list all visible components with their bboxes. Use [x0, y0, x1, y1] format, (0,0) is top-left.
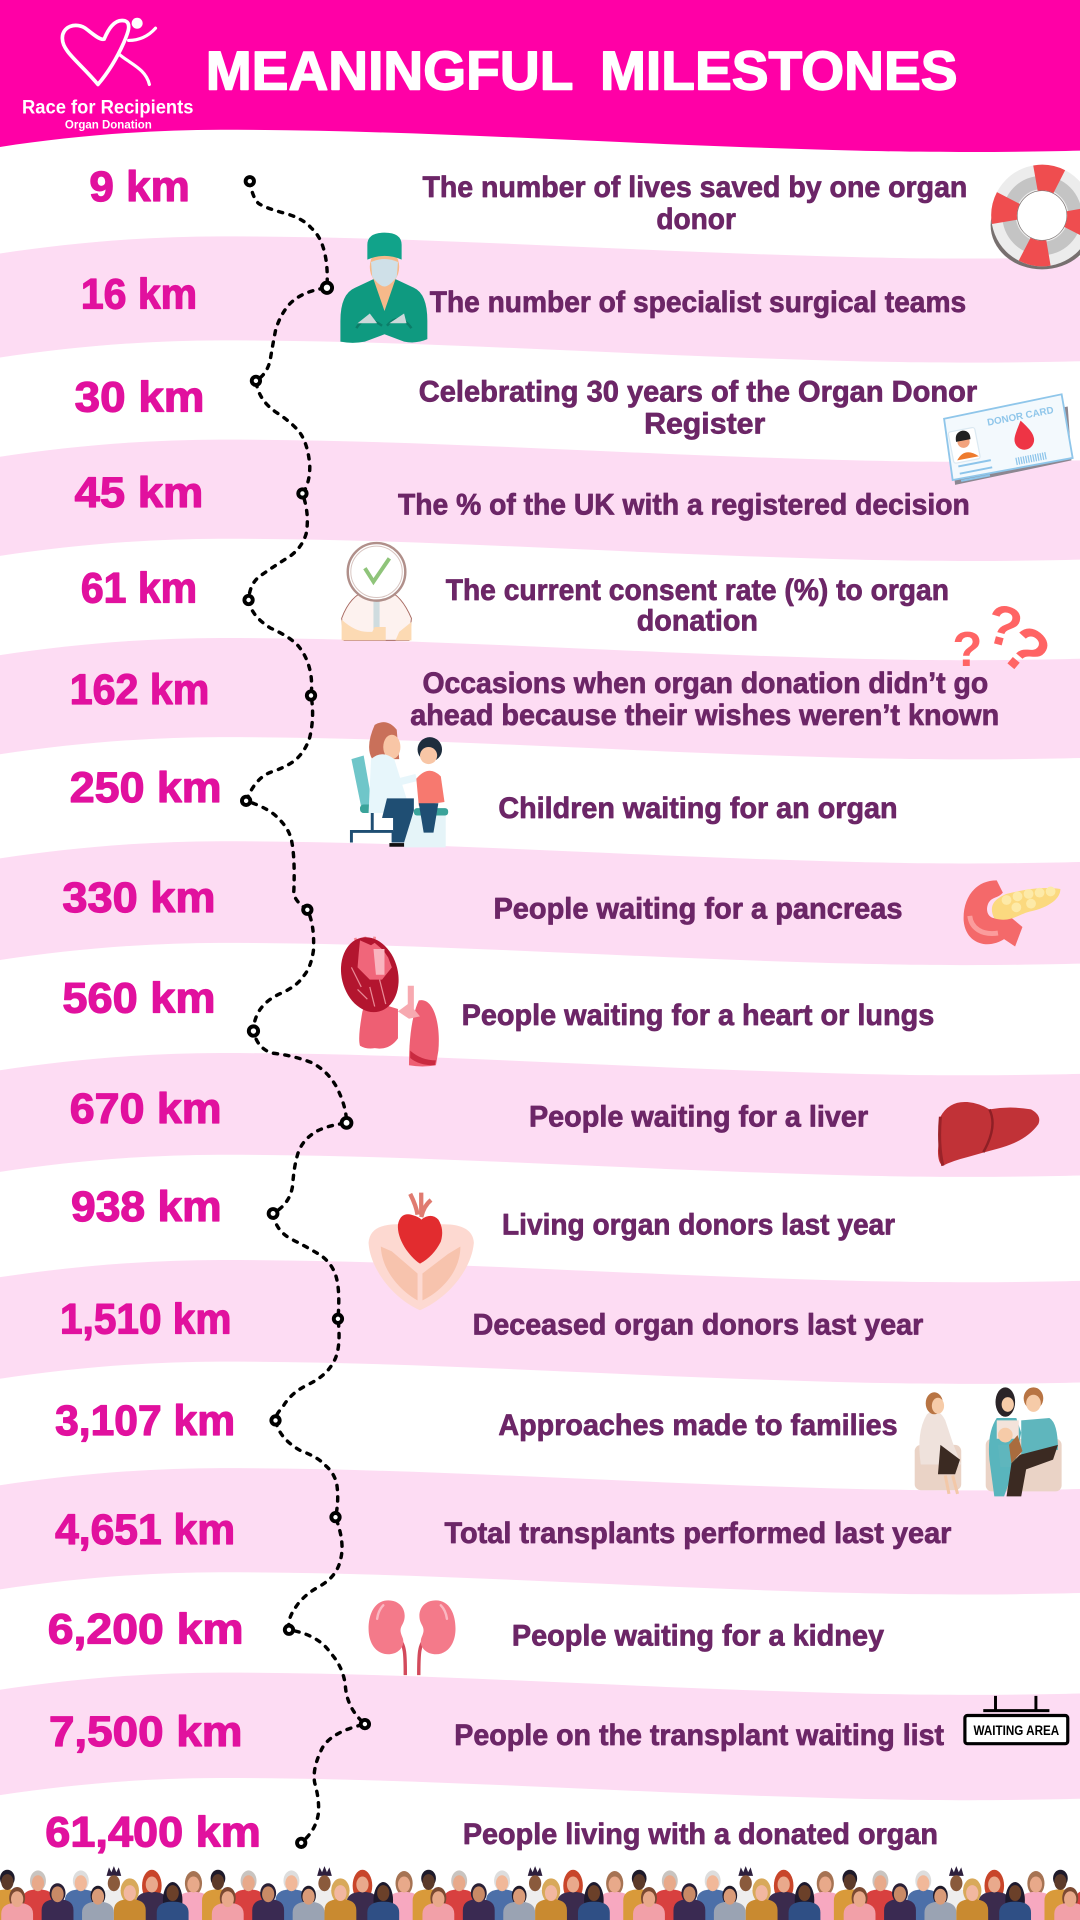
icon: donor card: DONOR CARD: [986, 405, 1055, 429]
row: 61 km: donation: [637, 605, 758, 638]
icon: heart and lungs: [333, 931, 439, 1067]
icon: question marks: ?: [988, 611, 1063, 690]
row: 16 km: The number of specialist surgical teams: [430, 286, 966, 319]
icon: question marks: [952, 591, 1063, 690]
row: 560 km: [62, 975, 934, 1032]
row: 7,500 km: 7,500 km: [49, 1708, 242, 1756]
icon: kidneys: [369, 1600, 456, 1675]
icon: question marks: ?: [979, 591, 1029, 661]
row: 330 km: 330 km: [62, 874, 216, 922]
header banner: [0, 0, 1080, 152]
row: 162 km: ahead because their wishes weren’t known: [410, 699, 999, 732]
icon: donor card: [944, 394, 1073, 485]
row: 61,400 km: [45, 1809, 938, 1857]
logo: Race for Recipients: [22, 18, 193, 132]
row: 7,500 km: People on the transplant waiting list: [454, 1719, 944, 1752]
row: 250 km: 250 km: [70, 764, 222, 812]
row: 45 km: [75, 469, 970, 521]
row: 6,200 km: People waiting for a kidney: [512, 1620, 885, 1653]
row: 938 km: Living organ donors last year: [502, 1208, 895, 1241]
row: 6,200 km: [48, 1605, 885, 1653]
row: 162 km: 162 km: [70, 666, 209, 714]
row: 16 km: [81, 271, 966, 319]
row: 30 km: [75, 373, 977, 440]
row: 61,400 km: 61,400 km: [45, 1809, 261, 1857]
icon: question marks: ?: [952, 623, 982, 677]
row: 670 km: 670 km: [70, 1085, 222, 1133]
row: 6,200 km: 6,200 km: [48, 1605, 244, 1653]
row: 61 km: The current consent rate (%) to organ: [446, 574, 949, 607]
row: 16 km: 16 km: [81, 271, 197, 319]
row: 3,107 km: [55, 1397, 898, 1445]
row: 61 km: 61 km: [81, 564, 197, 612]
row: 162 km: Occasions when organ donation didn’t go: [422, 667, 988, 700]
crowd of people along the bottom: [0, 1866, 1080, 1920]
logo name: Race for Recipients: [22, 97, 193, 118]
row: 1,510 km: Deceased organ donors last year: [473, 1309, 923, 1342]
icon: heart held in hands: [369, 1193, 474, 1310]
icon: surgeon: [340, 233, 427, 343]
row: 4,651 km: 4,651 km: [55, 1506, 235, 1554]
icon: person holding tick sign: [342, 543, 411, 640]
row: 938 km: [71, 1183, 895, 1241]
logo subtitle: Organ Donation: [65, 119, 152, 132]
row: 1,510 km: [60, 1295, 923, 1343]
icon: liver: [938, 1102, 1039, 1166]
row: 45 km: The % of the UK with a registered decision: [398, 488, 970, 521]
row: 61 km: [81, 564, 949, 638]
row: 30 km: 30 km: [75, 373, 204, 421]
row: 938 km: 938 km: [71, 1183, 222, 1231]
row: 250 km: [70, 764, 898, 825]
row: 250 km: Children waiting for an organ: [498, 792, 898, 825]
row: 45 km: 45 km: [75, 469, 203, 517]
row: 3,107 km: 3,107 km: [55, 1397, 235, 1445]
icon: pancreas: [964, 880, 1060, 947]
row: 1,510 km: 1,510 km: [60, 1295, 231, 1343]
row: 9 km: 9 km: [89, 163, 190, 211]
row: 7,500 km: [49, 1708, 944, 1756]
row: 3,107 km: Approaches made to families: [498, 1409, 898, 1442]
row: 9 km: [89, 163, 967, 236]
icon: heart and runner: [62, 18, 156, 84]
icon: life ring: [991, 172, 1080, 269]
row: 330 km: [62, 874, 902, 925]
icon: waiting area sign: WAITING AREA: [973, 1722, 1059, 1738]
row: 670 km: People waiting for a liver: [529, 1101, 868, 1134]
row: 61,400 km: People living with a donated organ: [463, 1818, 938, 1851]
icon: waiting area sign: [965, 1696, 1068, 1744]
row: 560 km: People waiting for a heart or lungs: [462, 999, 934, 1032]
icon: doctor and child: [351, 722, 448, 847]
row: 560 km: 560 km: [62, 975, 216, 1023]
row: 9 km: The number of lives saved by one organ: [422, 171, 967, 204]
title: MEANINGFUL MILESTONES: [206, 39, 958, 101]
row: 4,651 km: Total transplants performed last year: [444, 1517, 951, 1550]
row: 330 km: People waiting for a pancreas: [493, 892, 902, 925]
row: 30 km: Celebrating 30 years of the Organ Donor: [419, 376, 977, 409]
dashed route line with stops: [242, 177, 369, 1847]
row: 9 km: donor: [656, 203, 736, 236]
row: 670 km: [70, 1085, 868, 1134]
row: 4,651 km: [55, 1506, 951, 1554]
row: 162 km: [70, 666, 999, 732]
row: 30 km: Register: [644, 407, 765, 440]
icon: family with doctor: [915, 1387, 1062, 1496]
